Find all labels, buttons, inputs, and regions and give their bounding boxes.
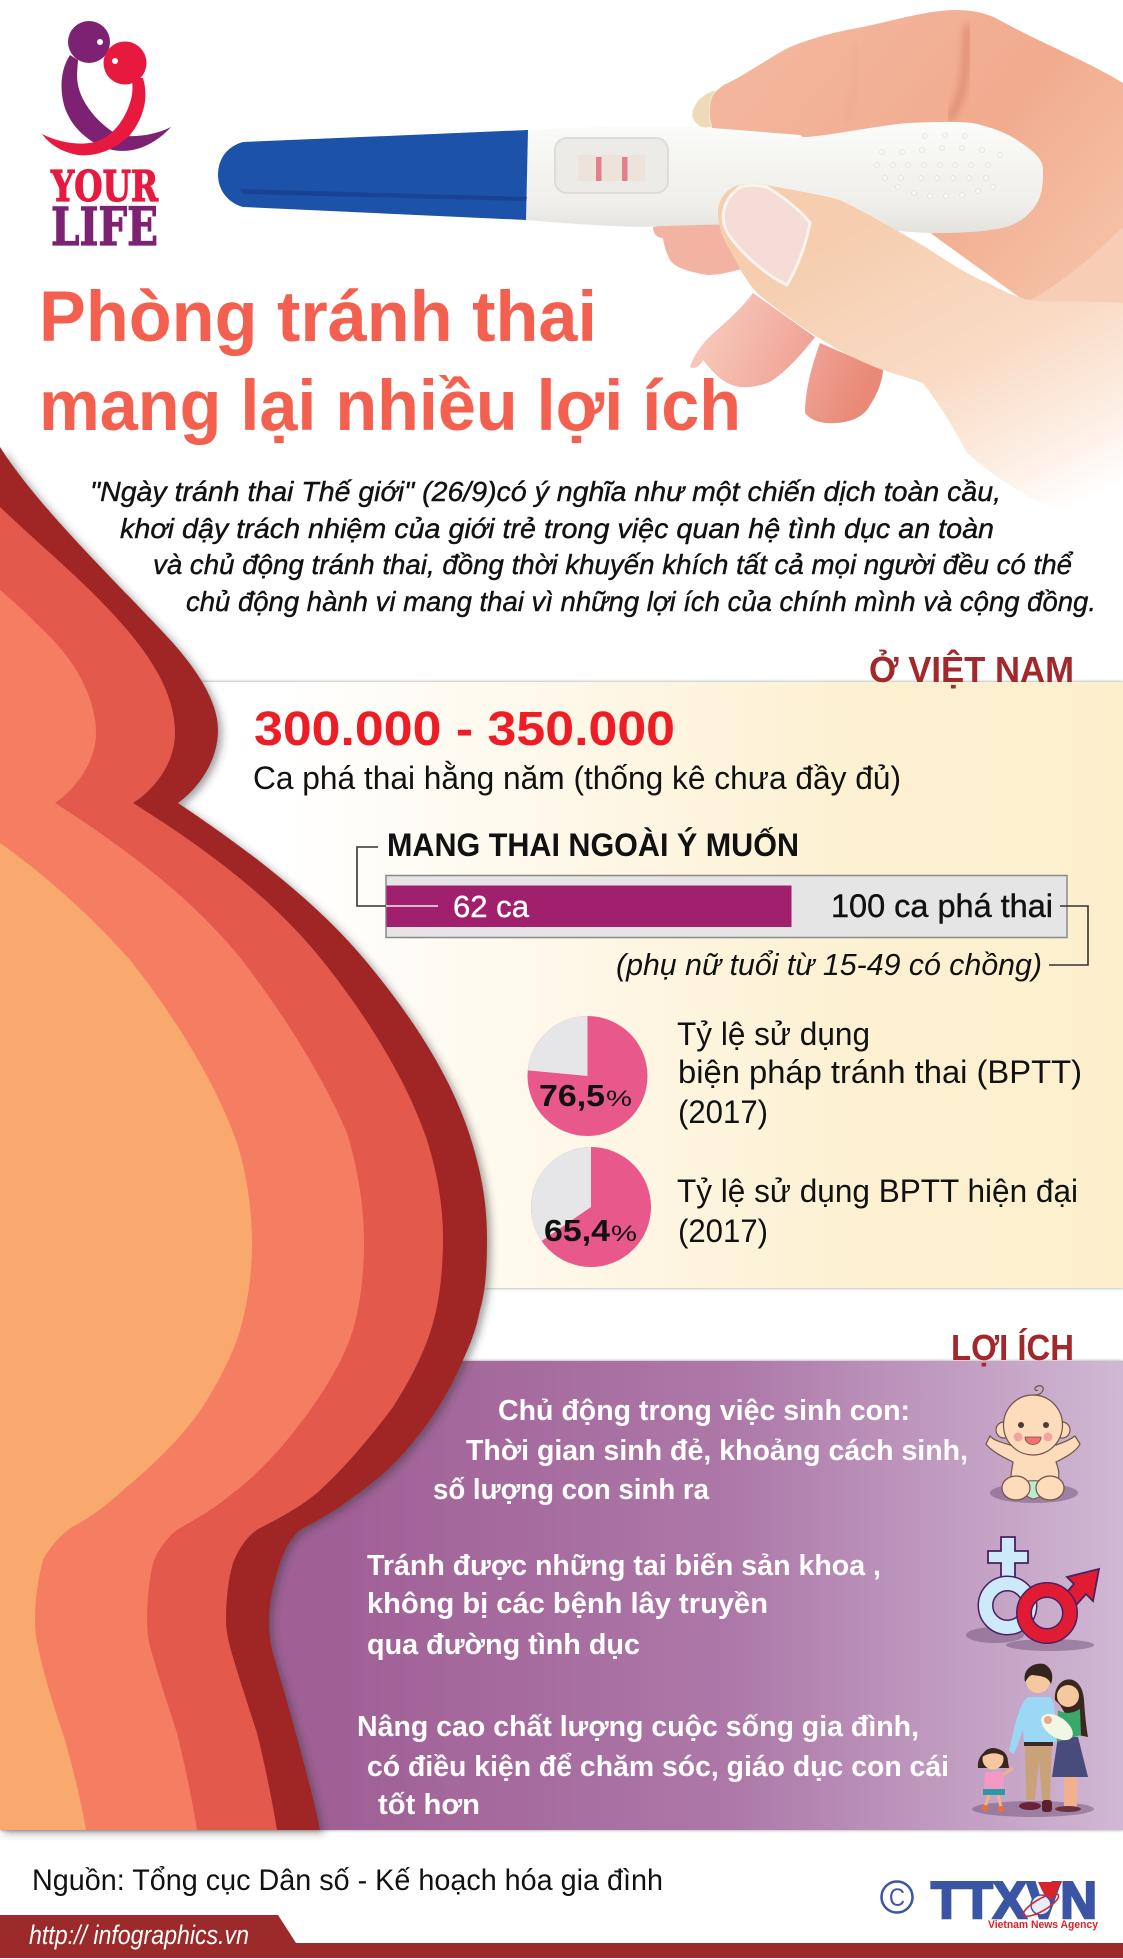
title: mang lại nhiều lợi ích [39, 367, 741, 446]
middle finger [653, 215, 745, 275]
pie label: contraception use: (2017) [678, 1094, 768, 1130]
thumb nail [723, 186, 810, 285]
female symbol [988, 1537, 1028, 1578]
intro paragraph: khơi dậy trách nhiệm của giới trẻ trong việc quan hệ tình dục an toàn [120, 513, 994, 544]
benefit 2 text: qua đường tình dục [367, 1629, 640, 1661]
logo text LIFE: LIFE [51, 197, 158, 258]
stat: abortions per year: Ca phá thai hằng năm (thống kê chưa đầy đủ) [253, 760, 901, 796]
title [39, 278, 741, 446]
logo figure red [42, 78, 145, 155]
benefit 3 text: có điều kiện để chăm sóc, giáo dục con cái [367, 1751, 949, 1783]
benefit 1 text: Thời gian sinh đẻ, khoảng cách sinh, [466, 1435, 968, 1467]
intro paragraph: chủ động hành vi mang thai vì những lợi ích của chính mình và cộng đồng. [186, 586, 1096, 617]
globe emblem on V [1021, 1882, 1062, 1920]
finger fold on the right [1030, 227, 1123, 303]
icon: family [972, 1664, 1094, 1817]
chart: unintended pregnancy bar: 62 ca [453, 889, 530, 924]
chart: unintended pregnancy bar: 100 ca phá thai [831, 888, 1053, 924]
chart: unintended pregnancy bar [357, 827, 1088, 982]
logo figure purple [62, 55, 171, 151]
stat: abortions per year [253, 703, 901, 796]
chart: unintended pregnancy bar: (phụ nữ tuổi từ 15-49 có chồng) [616, 947, 1042, 982]
footer bar: http:// infographics.vn [29, 1920, 249, 1950]
index finger nail [692, 90, 716, 128]
photo: hand holding pregnancy test [218, 10, 1123, 525]
pie label: modern contraception use: (2017) [678, 1213, 768, 1249]
pie label: modern contraception use [677, 1173, 1078, 1249]
icon: baby [986, 1386, 1080, 1503]
father [1025, 1741, 1052, 1800]
blue cap highlight and crease [240, 189, 527, 201]
pie label: modern contraception use: Tỷ lệ sử dụng BPTT hiện đại [677, 1173, 1078, 1209]
illustration: pregnant belly silhouette layers [0, 447, 487, 1830]
panel: benefits background [0, 1361, 1123, 1830]
title: Phòng tránh thai [39, 278, 597, 357]
intro paragraph [90, 476, 1096, 617]
intro paragraph: và chủ động tránh thai, đồng thời khuyến khích tất cả mọi người đều có thể [153, 549, 1073, 580]
footer bar [0, 1915, 1123, 1958]
mother [1052, 1737, 1088, 1777]
pie label: contraception use: biện pháp tránh thai (BPTT) [678, 1054, 1082, 1090]
newborn [1037, 1708, 1077, 1746]
male symbol [1060, 1569, 1099, 1612]
test stick white body [526, 122, 1043, 233]
intro paragraph: "Ngày tránh thai Thế giới" (26/9)có ý nghĩa như một chiến dịch toàn cầu, [90, 476, 1001, 507]
logo: TTXVN Vietnam News Agency: Vietnam News Agency [988, 1919, 1099, 1931]
pie chart: contraception use 76.5%: % [606, 1086, 632, 1111]
benefit 1 text: số lượng con sinh ra [433, 1474, 710, 1506]
handle grip dots [874, 132, 1002, 198]
heading: benefits: LỢI ÍCH [951, 1327, 1074, 1368]
benefit 1 text: Chủ động trong việc sinh con: [498, 1395, 910, 1427]
logo: TTXVN Vietnam News Agency: TTXVN [931, 1872, 1097, 1930]
pie chart: modern contraception use 65.4%: 65,4 [544, 1213, 611, 1248]
pie label: contraception use: Tỷ lệ sử dụng [677, 1016, 870, 1052]
logo: Your Life [42, 21, 171, 211]
pie chart: contraception use 76.5% [528, 1016, 648, 1136]
pie chart: modern contraception use 65.4% [531, 1147, 651, 1267]
pie chart: contraception use 76.5%: 76,5 [539, 1078, 605, 1113]
icon: gender symbols [966, 1537, 1099, 1651]
pie label: contraception use [677, 1016, 1082, 1130]
pie chart: modern contraception use 65.4%: % [611, 1221, 637, 1246]
source text: Nguồn: Tổng cục Dân số - Kế hoạch hóa gia đình [32, 1864, 663, 1897]
test stick blue cap [218, 130, 528, 220]
benefit 3 text [357, 1711, 949, 1821]
ring finger [690, 293, 815, 387]
benefit 3 text: tốt hơn [378, 1789, 480, 1821]
benefit 3 text: Nâng cao chất lượng cuộc sống gia đình, [357, 1711, 919, 1743]
benefit 1 text [433, 1395, 968, 1506]
benefit 2 text: không bị các bệnh lây truyền [367, 1588, 768, 1620]
index finger and palm [703, 10, 1123, 310]
pinky finger [805, 343, 883, 423]
skin creases [948, 24, 970, 122]
logo: TTXVN Vietnam News Agency: C [889, 1884, 905, 1912]
stat: abortions per year: 300.000 - 350.000 [254, 703, 675, 756]
benefit 2 text: Tránh được những tai biến sản khoa , [367, 1550, 881, 1582]
girl [985, 1795, 1001, 1807]
thumb and lower hand [718, 184, 1123, 525]
benefit 2 text [367, 1550, 881, 1661]
logo text YOUR: YOUR [50, 162, 159, 211]
heading: in Vietnam: Ở VIỆT NAM [869, 648, 1074, 690]
chart: unintended pregnancy bar: MANG THAI NGOÀI Ý MUỐN [387, 827, 799, 863]
test window [555, 138, 668, 193]
panel: Vietnam statistics background [0, 682, 1123, 1288]
